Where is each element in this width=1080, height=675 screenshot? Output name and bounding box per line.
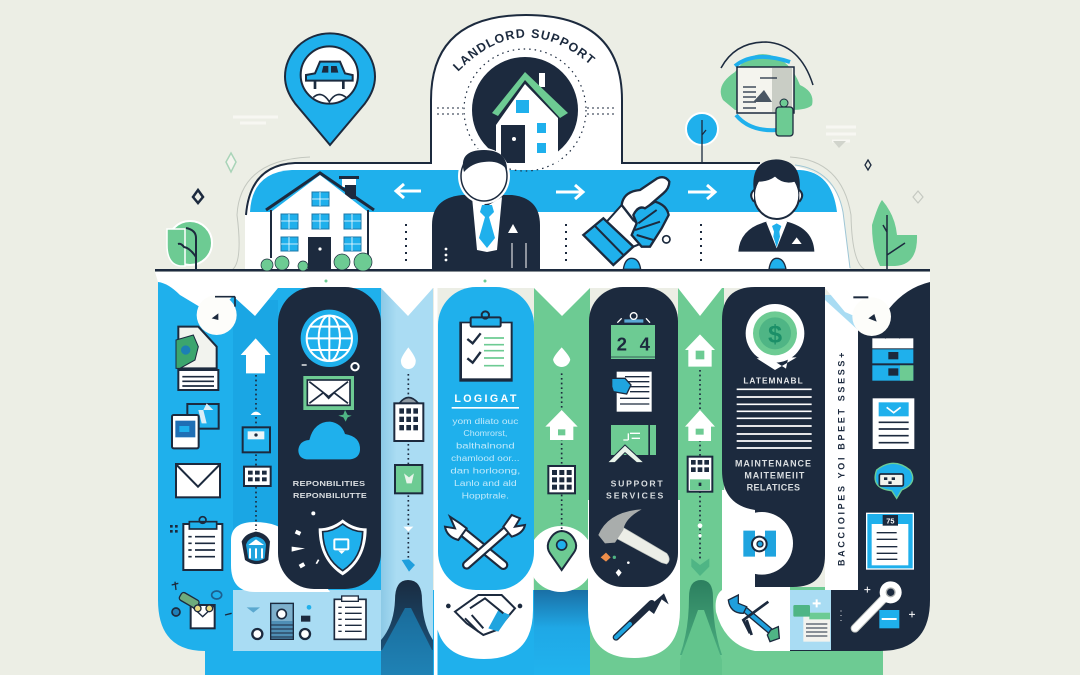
icon: green drop xyxy=(553,347,570,367)
panel: right white and navy column xyxy=(786,282,930,651)
panel: light blue column xyxy=(381,285,438,675)
icon: house green column xyxy=(545,410,578,440)
text: logistics body xyxy=(450,417,520,501)
icon: calendar 24: 24 xyxy=(617,334,651,355)
text: logistics body: balthalnond xyxy=(456,442,515,451)
icon: home lower xyxy=(685,410,715,441)
panel: maintenance navy pill xyxy=(722,287,825,587)
white band with valleys xyxy=(155,272,930,322)
icon: green tile xyxy=(395,465,422,493)
icon: bottom clipboard xyxy=(334,596,366,639)
icon: checklist clipboard xyxy=(459,311,513,382)
icon: crossed wrenches xyxy=(445,515,525,565)
icon: cloud xyxy=(298,422,360,459)
header: landlord support arch xyxy=(155,15,930,272)
panel: green columns xyxy=(534,285,724,675)
text: logistics body: yom dliato ouc xyxy=(452,417,518,426)
icon: right green tree xyxy=(872,200,917,270)
text: support services xyxy=(606,478,664,501)
icon: grid with green base xyxy=(688,457,712,492)
dotted connector centre left xyxy=(406,374,411,560)
text: support services: SUPPORT xyxy=(611,478,663,488)
text: support services: SERVICES xyxy=(606,491,664,501)
icon: handshake xyxy=(446,595,522,635)
white halos xyxy=(231,490,790,659)
icon: hammer xyxy=(598,509,669,577)
icon: pointing hand xyxy=(583,177,670,265)
icon: blue location markers xyxy=(623,258,786,269)
text: vertical caption: BACCIOIPES YOI BPEET SSESS+ xyxy=(836,353,846,566)
icon: bank badge xyxy=(242,532,270,564)
icon: document fold xyxy=(612,372,652,412)
heading: logigat: LOGIGAT xyxy=(454,393,517,405)
text: responsibilities xyxy=(293,481,367,500)
text lines block xyxy=(737,389,812,448)
text: maintenance relations: RELATICES xyxy=(747,482,800,492)
icon: blue green wrench xyxy=(728,595,779,642)
icon: document with person xyxy=(721,42,813,136)
icon: blue H spiral xyxy=(730,512,793,575)
icon: second person xyxy=(738,159,814,252)
text: logistics body: dan horloong, xyxy=(450,466,520,475)
icon: businessman xyxy=(432,148,540,270)
dotted connector green column xyxy=(559,373,564,530)
icon: green panel with roof xyxy=(607,425,656,463)
bottom colour band xyxy=(205,587,883,675)
text: logistics body: Lanlo and ald xyxy=(454,479,517,488)
icon: cards xyxy=(172,403,219,448)
dotted connectors on strip xyxy=(406,224,701,266)
panel: responsibilities navy pill xyxy=(278,287,381,589)
icon: calendar 24 xyxy=(611,313,655,359)
panel: left blue column xyxy=(158,282,381,651)
icon: home tile top xyxy=(685,334,715,367)
dotted connector green column two xyxy=(697,370,702,558)
icon: central house in circle xyxy=(437,49,617,171)
icon: left green tree xyxy=(167,221,212,270)
text: logistics body: chamlood oor... xyxy=(451,454,519,463)
icon: socket wrench xyxy=(841,581,915,628)
icon: building xyxy=(394,397,423,441)
icon: status bars xyxy=(872,329,913,381)
icon: framed document xyxy=(867,513,913,569)
heading: landlord support: LANDLORD SUPPORT xyxy=(452,29,596,72)
icon: drop xyxy=(401,347,416,369)
icon: top right pointer ball xyxy=(852,297,891,336)
icon: green document xyxy=(793,599,830,642)
icon: diamond marker xyxy=(402,527,415,572)
icon: shield document xyxy=(176,327,218,390)
text: responsibilities: REPONBILIUTTE xyxy=(293,493,367,500)
icon: small umbrella xyxy=(251,412,261,415)
icon: blue tree xyxy=(686,113,718,163)
icon: green pin xyxy=(548,531,576,570)
icon: framed document: 75 xyxy=(886,516,894,525)
zoomed coordinates, hand and person xyxy=(583,159,814,269)
icon: location pin with car xyxy=(285,33,375,145)
text: responsibilities: REPONBILITIES xyxy=(293,481,366,488)
text: maintenance relations xyxy=(735,458,811,492)
icon: globe xyxy=(301,310,359,370)
icon: house on strip xyxy=(261,173,374,271)
zoomed coordinates, right half xyxy=(545,297,915,642)
zoomed coordinates, left half xyxy=(170,295,525,639)
icon: dollar speech bubble xyxy=(746,304,804,370)
icon: green arrow xyxy=(691,523,709,576)
icon: dollar speech bubble: $ xyxy=(768,321,782,349)
small green dots xyxy=(324,280,486,282)
icon: blue framed box xyxy=(243,427,270,452)
icon: small pick tool xyxy=(616,593,669,637)
icon: document with chevron xyxy=(873,398,914,449)
icon: chat bubble xyxy=(875,463,913,498)
icon: corner pointer ball xyxy=(197,295,237,335)
dotted connector left xyxy=(253,375,258,530)
icon: up arrow house xyxy=(241,338,271,373)
decorative sparkles xyxy=(193,117,923,203)
arrows on strip xyxy=(396,184,715,199)
heading: latemnabl: LATEMNABL xyxy=(743,375,803,385)
text: maintenance relations: MAITEMEIIT xyxy=(744,470,805,480)
icon: envelope xyxy=(176,464,220,497)
icon: shield with monitor xyxy=(292,511,367,575)
icon: tool envelope cluster xyxy=(172,582,232,628)
icon: clipboard left xyxy=(170,517,222,570)
icon: grid green column xyxy=(548,466,575,493)
icon: grid window xyxy=(244,467,271,486)
text: maintenance relations: MAINTENANCE xyxy=(735,458,811,468)
text: logistics body: Hopptrale. xyxy=(462,492,509,501)
text: logistics body: Chomrorst, xyxy=(463,429,507,438)
icon: green framed envelope xyxy=(303,376,354,422)
panel: logistics blue pill xyxy=(438,287,534,590)
icon: bottom doc xyxy=(247,603,311,639)
panel: support services navy pill xyxy=(589,287,678,587)
